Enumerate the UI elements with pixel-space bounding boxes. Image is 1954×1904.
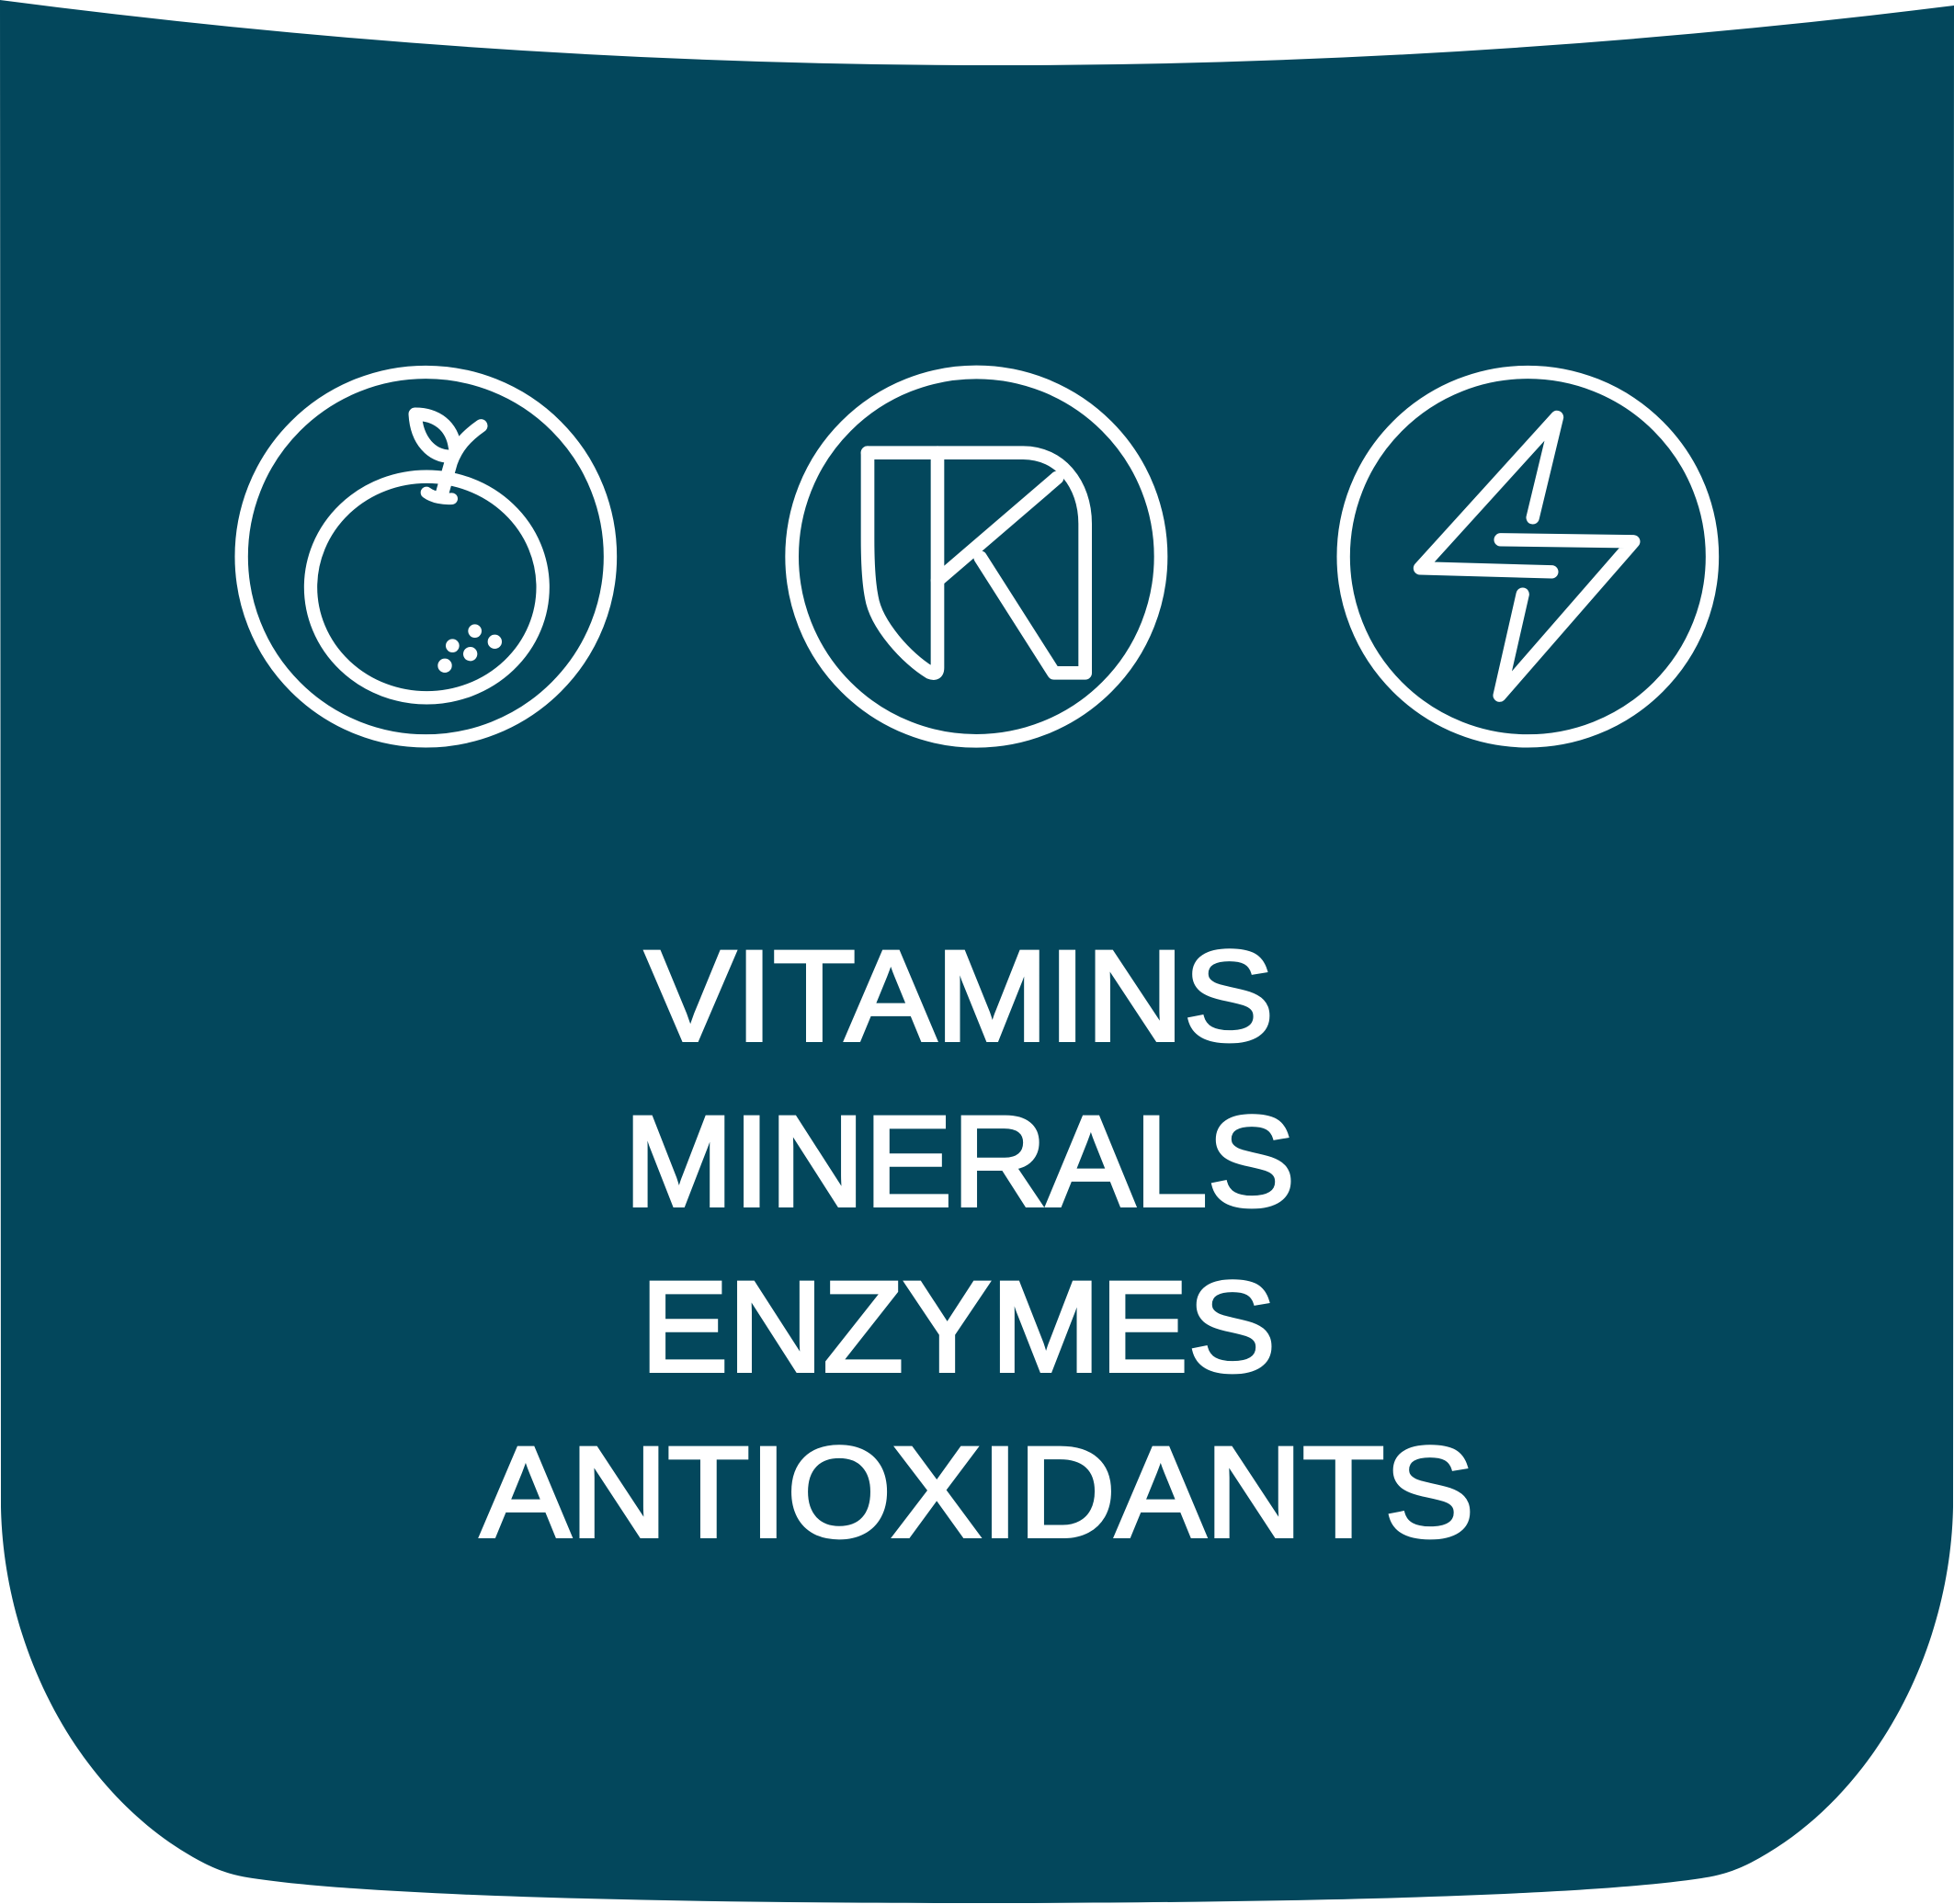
label: antioxidants: ANTIOXIDANTS xyxy=(481,1420,1474,1564)
icon: vitamin K mineral shield xyxy=(792,372,1161,741)
label: enzymes: ENZYMES xyxy=(641,1254,1276,1399)
text block: nutrient list xyxy=(481,924,1474,1564)
icon: lightning bolt enzyme xyxy=(1344,372,1712,741)
label: minerals: MINERALS xyxy=(624,1089,1295,1233)
label: vitamins: VITAMINS xyxy=(645,924,1274,1068)
icon: orange vitamin xyxy=(242,372,610,741)
